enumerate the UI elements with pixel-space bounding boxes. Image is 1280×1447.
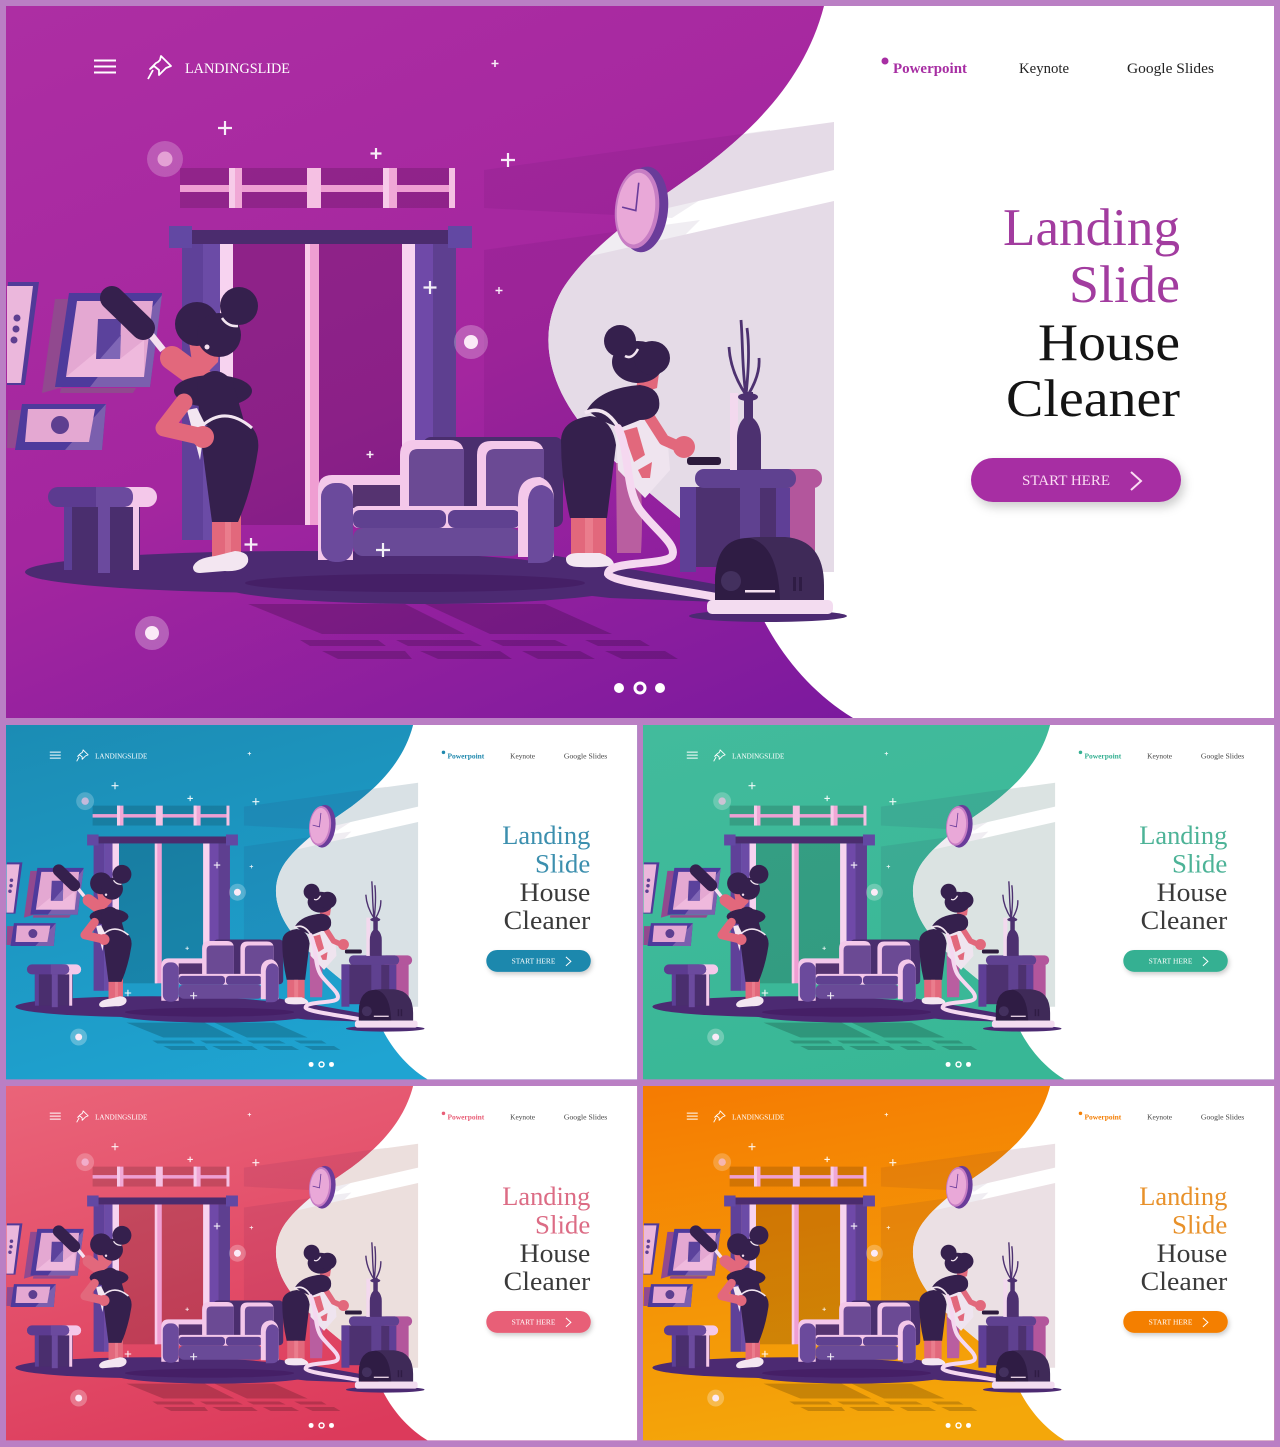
nav links: Powerpoint xyxy=(447,752,485,760)
nav links: Powerpoint xyxy=(447,1113,485,1121)
nav links: Keynote xyxy=(510,752,535,760)
apron xyxy=(615,412,670,498)
headline: Cleaner xyxy=(504,906,591,935)
headline: Landing xyxy=(1003,199,1180,257)
hair tie xyxy=(222,318,238,326)
hair xyxy=(612,341,670,383)
duster xyxy=(112,298,163,350)
headline: Cleaner xyxy=(504,1267,591,1296)
nav links: Google Slides xyxy=(564,752,607,760)
blouse with puffed sleeves xyxy=(174,371,252,425)
earring xyxy=(204,344,210,350)
illustration: cleaning scene xyxy=(7,6,1274,718)
carousel dots xyxy=(309,1062,334,1067)
headline: Cleaner xyxy=(1141,906,1228,935)
glow dot: top left xyxy=(147,141,183,177)
fence decoration xyxy=(180,168,455,208)
illustration: cleaning scene xyxy=(643,725,1274,1079)
panel background gradient xyxy=(6,6,1274,718)
nav links: Powerpoint xyxy=(1084,1113,1122,1121)
headline: Slide xyxy=(535,1210,590,1239)
carousel dots xyxy=(309,1423,334,1428)
start here button xyxy=(1123,950,1228,972)
carousel dots xyxy=(946,1062,971,1067)
logo wordmark: LANDINGSLIDE xyxy=(732,751,785,760)
skirt xyxy=(200,420,258,522)
sparkles xyxy=(218,60,515,557)
neck and face xyxy=(188,335,220,372)
carousel dots xyxy=(614,683,665,693)
face and neck xyxy=(635,366,660,395)
nav links xyxy=(1079,1112,1244,1121)
headline: Slide xyxy=(1172,849,1227,878)
blue background xyxy=(6,725,637,1079)
nav links: Keynote xyxy=(510,1113,535,1121)
side table xyxy=(680,469,822,572)
wall picture: small frame xyxy=(7,404,106,450)
panel: green variant xyxy=(643,725,1274,1079)
woman with vacuum xyxy=(561,325,695,567)
nav links: Google Slides xyxy=(564,1113,607,1121)
vase with plant xyxy=(729,320,761,470)
red background xyxy=(6,1086,637,1440)
vacuum hose xyxy=(608,428,716,597)
panel: red variant xyxy=(6,1086,637,1440)
headline: House xyxy=(520,1239,590,1268)
apron strap xyxy=(585,410,620,430)
headline xyxy=(1003,199,1180,428)
vacuum cleaner xyxy=(689,537,847,622)
logo wordmark: LANDINGSLIDE xyxy=(95,1112,148,1121)
headline: Landing xyxy=(502,821,590,850)
panel: purple main slide xyxy=(6,6,1274,718)
reaching arm xyxy=(648,415,680,447)
glow dot: bottom left xyxy=(135,616,169,650)
shoes xyxy=(193,551,248,573)
headline: Slide xyxy=(1069,256,1180,314)
green background xyxy=(643,725,1274,1079)
headline: Landing xyxy=(1139,1182,1227,1211)
headline: House xyxy=(1157,1239,1227,1268)
hand xyxy=(192,426,214,448)
start here button: START HERE xyxy=(1022,473,1110,489)
start here button xyxy=(971,458,1181,502)
headline: House xyxy=(1038,314,1180,372)
headline: Slide xyxy=(1172,1210,1227,1239)
raised arm xyxy=(172,358,202,380)
wall picture: left strip xyxy=(7,282,39,385)
hamburger menu icon xyxy=(94,60,116,72)
illustration: cleaning scene xyxy=(6,725,637,1079)
nav links: Keynote xyxy=(1147,1113,1172,1121)
illustration: cleaning scene xyxy=(643,1086,1274,1440)
logo wordmark: LANDINGSLIDE xyxy=(185,61,290,77)
lower arm xyxy=(164,402,203,437)
carousel dots xyxy=(946,1423,971,1428)
floor shadow rug xyxy=(25,551,720,604)
logo wordmark: LANDINGSLIDE xyxy=(95,751,148,760)
shoes xyxy=(566,553,614,567)
headline: House xyxy=(520,878,590,907)
nav links xyxy=(442,1112,607,1121)
hair xyxy=(175,302,241,357)
nav links: Keynote xyxy=(1147,752,1172,760)
back leg xyxy=(616,463,642,553)
woman with feather duster xyxy=(112,287,258,573)
window reflection on floor xyxy=(248,604,678,659)
wall clock xyxy=(611,164,672,255)
nav links: Google Slides xyxy=(1201,1113,1244,1121)
panel: blue variant xyxy=(6,725,637,1079)
start here button: START HERE xyxy=(1149,1317,1193,1326)
start here button xyxy=(1123,1311,1228,1333)
grey wall bands on white xyxy=(484,122,834,572)
legs xyxy=(571,518,606,556)
legs xyxy=(212,515,241,557)
start here button: START HERE xyxy=(512,956,556,965)
headline xyxy=(502,821,591,935)
start here button: START HERE xyxy=(1149,956,1193,965)
nav links xyxy=(442,751,607,760)
logo wordmark: LANDINGSLIDE xyxy=(732,1112,785,1121)
black item on table xyxy=(687,457,721,465)
glow dot: centre xyxy=(454,325,488,359)
headline xyxy=(1139,821,1228,935)
headline xyxy=(1139,1182,1228,1296)
nav links: Powerpoint xyxy=(1084,752,1122,760)
stool xyxy=(48,487,157,573)
nav: Powerpoint: Powerpoint xyxy=(893,61,967,77)
nav active dot xyxy=(882,58,888,64)
hair bun xyxy=(604,325,636,357)
wall bands over background xyxy=(484,130,770,440)
start here button xyxy=(486,950,591,972)
headline: Landing xyxy=(502,1182,590,1211)
illustration: cleaning scene xyxy=(6,1086,637,1440)
nav links: Google Slides xyxy=(1201,752,1244,760)
start here button xyxy=(486,1311,591,1333)
headline: Landing xyxy=(1139,821,1227,850)
hand xyxy=(673,436,695,458)
hair tie xyxy=(625,349,638,357)
sofa xyxy=(318,437,563,563)
headline xyxy=(502,1182,591,1296)
wall picture: large frame xyxy=(42,293,162,393)
start here button: START HERE xyxy=(512,1317,556,1326)
trousers xyxy=(561,416,616,518)
orange background xyxy=(643,1086,1274,1440)
headline: House xyxy=(1157,878,1227,907)
apron strap xyxy=(202,416,252,428)
nav: Keynote: Keynote xyxy=(1019,61,1069,77)
apron tail xyxy=(187,408,205,460)
door frame with columns xyxy=(169,226,472,540)
nav: Google Slides: Google Slides xyxy=(1127,61,1214,77)
white curved content area xyxy=(548,6,1274,718)
nav links xyxy=(1079,751,1244,760)
headline: Slide xyxy=(535,849,590,878)
headline: Cleaner xyxy=(1141,1267,1228,1296)
pin logo icon xyxy=(148,56,171,79)
hair bun xyxy=(220,287,258,325)
panel: orange variant xyxy=(643,1086,1274,1440)
headline: Cleaner xyxy=(1006,370,1180,428)
top xyxy=(587,385,659,428)
